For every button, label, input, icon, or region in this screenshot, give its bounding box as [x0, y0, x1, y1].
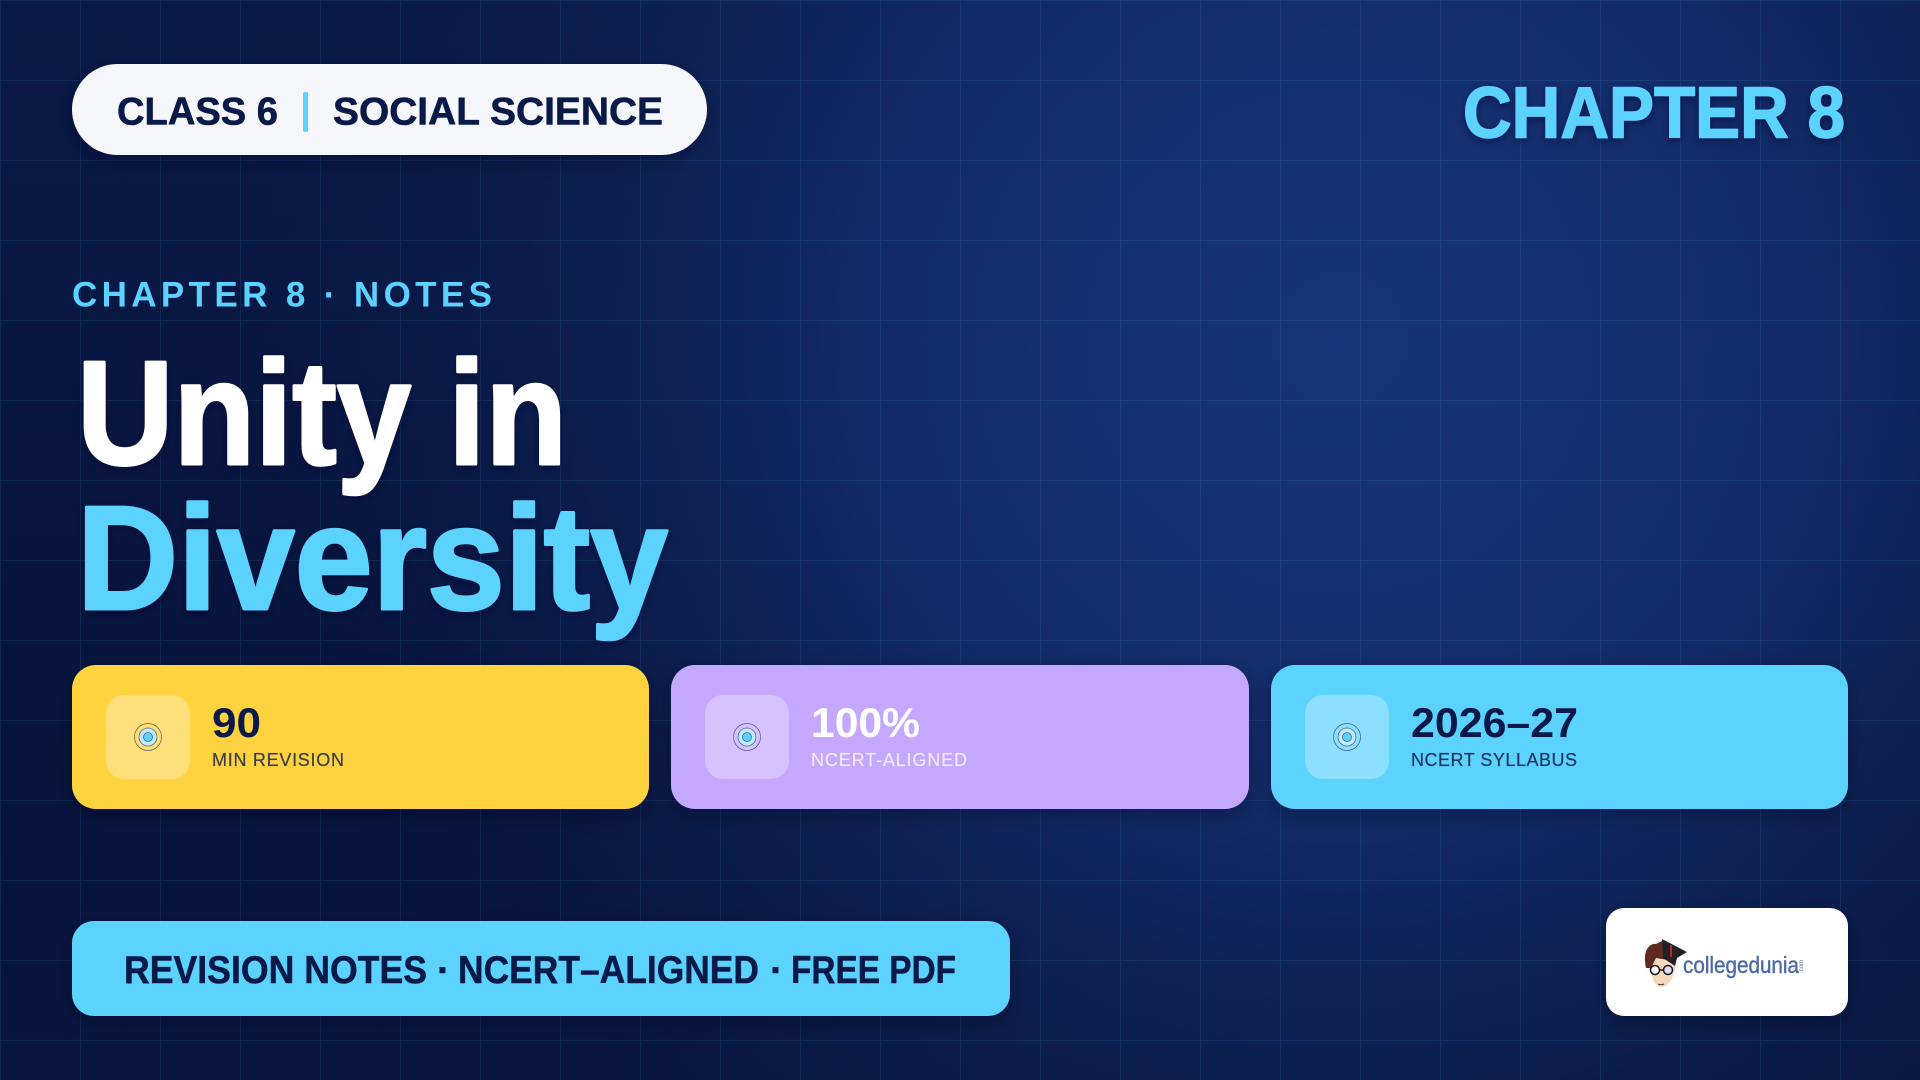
footer banner: REVISION NOTES [124, 949, 427, 992]
icon: student mascot [1645, 939, 1687, 987]
footer banner: FREE PDF [791, 949, 956, 992]
class and subject pill: CLASS 6 [117, 90, 278, 134]
footer banner [72, 921, 1010, 1016]
footer banner: NCERT–ALIGNED [458, 949, 759, 992]
stat card: 90 min revision: MIN REVISION [212, 750, 344, 770]
logo card: collegedunia: .com [1799, 960, 1805, 973]
title: Diversity [77, 476, 668, 641]
class and subject pill: SOCIAL SCIENCE [333, 90, 663, 134]
class and subject pill [72, 64, 707, 155]
eyebrow: chapter notes: CHAPTER 8 · NOTES [72, 276, 492, 314]
stat card: 2026-27 NCERT syllabus: 2026–27 [1411, 699, 1578, 746]
stat card: 2026-27 NCERT syllabus: NCERT SYLLABUS [1411, 750, 1577, 770]
stat card: 90 min revision: 90 [212, 699, 261, 746]
stat card: 100% NCERT-aligned: 100% [811, 699, 920, 746]
logo card: collegedunia [1606, 908, 1848, 1016]
title: Unity in [77, 331, 567, 496]
stat card: 2026-27 NCERT syllabus [1271, 665, 1848, 809]
stat card: 100% NCERT-aligned: NCERT-ALIGNED [811, 750, 967, 770]
icon: target [1305, 695, 1389, 779]
footer banner: · [770, 949, 783, 992]
footer banner: · [437, 949, 450, 992]
chapter number heading: CHAPTER 8 [1463, 74, 1845, 154]
stat card: 90 min revision [72, 665, 649, 809]
stat card: 100% NCERT-aligned [671, 665, 1249, 809]
title [77, 331, 668, 641]
logo card: collegedunia: collegedunia [1683, 952, 1799, 978]
icon: target [705, 695, 789, 779]
icon: target [106, 695, 190, 779]
